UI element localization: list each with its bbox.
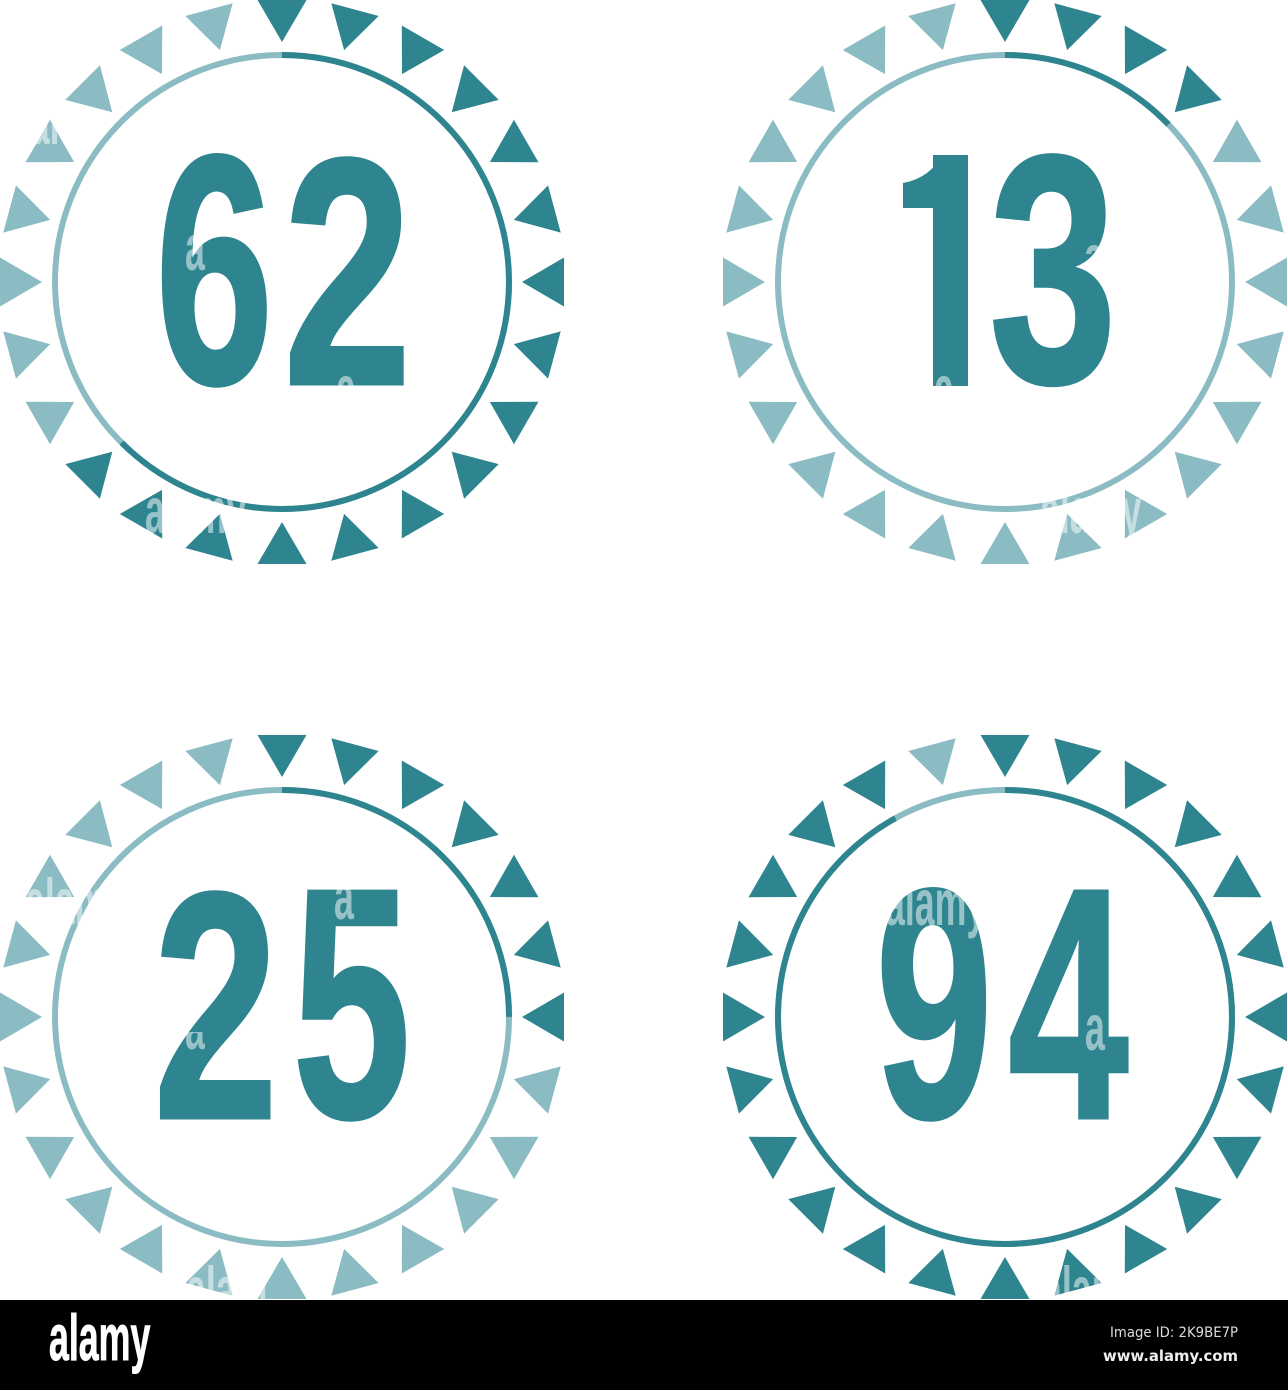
number 25: [153, 820, 411, 1188]
gauge: 25: [0, 735, 564, 1299]
gauge: 62: [0, 0, 564, 564]
watermark fragments: alamy: [0, 87, 101, 159]
footer bar: [0, 1300, 1288, 1390]
progress ring 62: [55, 55, 509, 509]
watermark fragments: alamy: [885, 868, 986, 940]
watermark fragments: alamy: [25, 867, 126, 939]
number 94: [875, 820, 1130, 1189]
watermark fragments: alam: [186, 1255, 267, 1327]
number 13: [903, 153, 1110, 388]
watermark fragments: alam: [1042, 1255, 1123, 1327]
watermark fragments: alamy: [145, 476, 246, 548]
watermark fragments: alamy: [1040, 476, 1141, 548]
triangle ring 62: [0, 0, 564, 564]
triangle ring 13: [723, 0, 1287, 564]
gauge: 13: [723, 0, 1287, 564]
watermark fragments: a: [1084, 223, 1104, 295]
progress ring 25: [55, 790, 509, 1244]
watermark fragments: a: [334, 862, 354, 934]
watermark fragments: a: [185, 213, 205, 285]
watermark fragments: a: [336, 354, 356, 426]
website: www.alamy.com: [1103, 1347, 1238, 1365]
number 25: 2: [153, 825, 278, 1188]
triangle ring 25: [0, 735, 564, 1299]
number 62: 2: [283, 91, 412, 453]
number 62: [155, 87, 412, 453]
triangle ring 94: [723, 735, 1287, 1299]
watermark fragments: a: [185, 992, 205, 1064]
progress ring 94: [778, 790, 1232, 1244]
number 94: 9: [875, 822, 993, 1187]
progress ring 13: [778, 55, 1232, 509]
number 62: 6: [155, 87, 274, 453]
watermark fragments: a: [1085, 993, 1105, 1065]
footer logo: alamy: [49, 1303, 150, 1375]
watermark fragments: a: [934, 354, 954, 426]
number 13: 3: [989, 87, 1117, 451]
number 13: 1: [877, 73, 1012, 464]
number 25: 5: [292, 820, 411, 1187]
number 94: 4: [1008, 820, 1130, 1189]
image id: Image ID: 2K9BE7P: [1110, 1325, 1238, 1341]
watermark fragments: [0, 87, 1141, 1327]
gauge: 94: [723, 735, 1287, 1299]
